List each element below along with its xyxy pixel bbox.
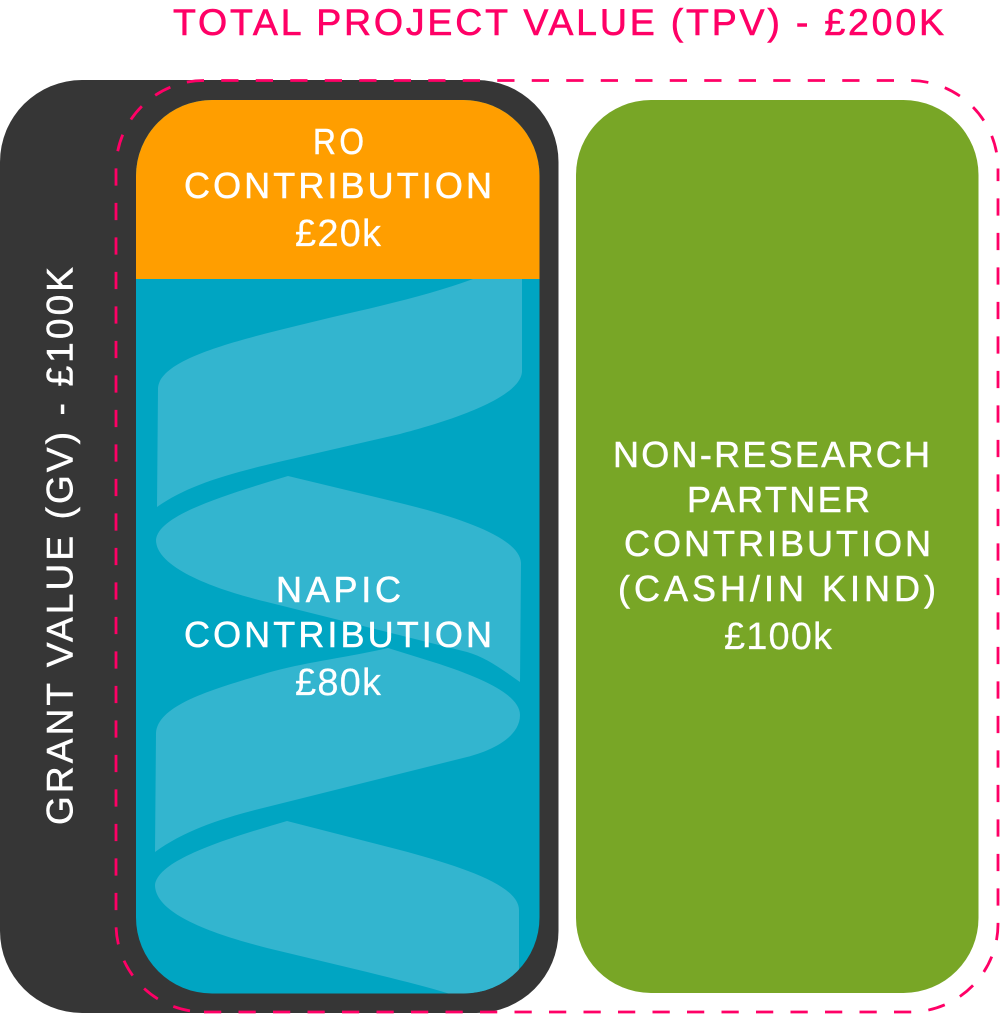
label: non-research partner contribution: £100k [724,616,833,658]
label: RO contribution: £20k [295,213,382,255]
label: non-research partner contribution: (CASH/IN KIND) [618,568,936,609]
panel: RO contribution [136,100,540,279]
label: NAPIC contribution: CONTRIBUTION [184,614,492,655]
label: RO contribution [184,122,492,255]
label: NAPIC contribution [184,569,492,704]
label: NAPIC contribution: £80k [295,662,382,704]
label: NAPIC contribution: NAPIC [276,569,401,610]
title: total project value: TOTAL PROJECT VALUE (TPV) - £200K [173,1,944,43]
panel: NAPIC contribution [136,100,540,994]
label: non-research partner contribution [613,434,936,658]
label: RO contribution: RO [313,122,364,162]
panel: grant value background [0,80,558,1013]
label: non-research partner contribution: CONTRIBUTION [624,523,931,564]
panel: non-research partner contribution [576,100,978,993]
label: non-research partner contribution: PARTNER [687,479,870,520]
label: grant value: GRANT VALUE (GV) - £100K [40,267,80,825]
label: RO contribution: CONTRIBUTION [184,165,492,206]
helix ribbons [155,279,522,994]
label: non-research partner contribution: NON-RESEARCH [613,434,930,475]
